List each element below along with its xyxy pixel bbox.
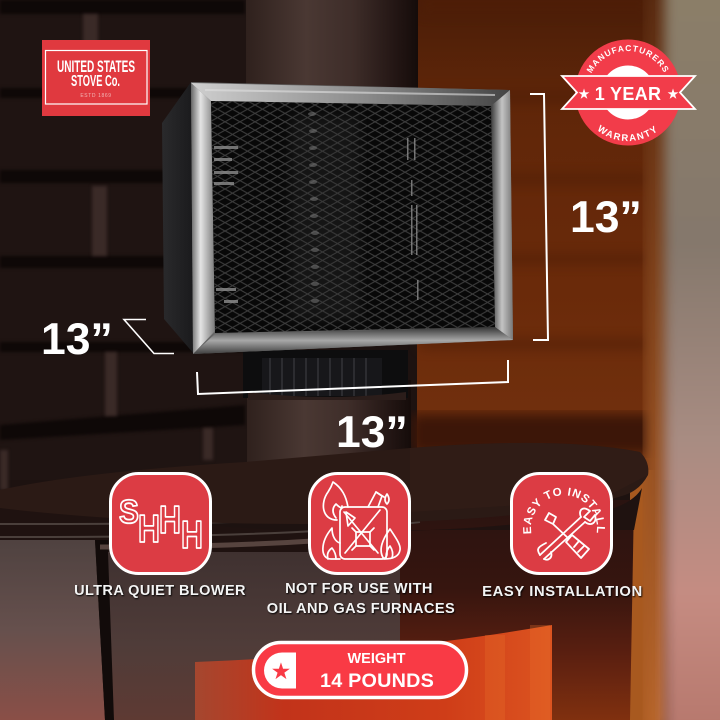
feature: easy installation: EASY INSTALLATION: [482, 584, 643, 600]
weight pill: WEIGHT: [348, 651, 406, 667]
wood wall: [411, 0, 677, 720]
icon: star tag: ★: [272, 661, 290, 683]
feature: not for oil and gas furnaces: OIL AND GAS FURNACES: [267, 601, 455, 617]
warranty badge: [560, 40, 697, 146]
feature: ultra quiet blower: ULTRA QUIET BLOWER: [74, 583, 246, 599]
feature: easy installation: [482, 472, 644, 600]
warranty badge: 1 YEAR: [595, 84, 661, 104]
brick wall: [0, 0, 260, 490]
ribbon: [562, 76, 695, 109]
feature: not for oil and gas furnaces: NOT FOR USE WITH: [285, 581, 433, 597]
blurred foreground right: [664, 0, 720, 720]
dimension: depth: [41, 315, 174, 364]
badge arc text: MANUFACTURERS: [586, 45, 668, 73]
mesh grille: [211, 101, 495, 333]
dimension: width: [197, 360, 508, 457]
feature: not for oil and gas furnaces: [267, 474, 455, 617]
product: blower unit: [162, 82, 513, 400]
icon: shhh: H: [159, 498, 181, 542]
warranty badge: ★: [579, 87, 590, 101]
weight pill: 14 POUNDS: [320, 670, 434, 692]
stove body: [0, 443, 648, 720]
side panel: [162, 82, 194, 354]
warranty badge: ★: [668, 87, 679, 101]
icon: shhh: [110, 474, 210, 574]
icon: shhh: H: [138, 507, 160, 551]
dimension: width: 13”: [336, 408, 408, 457]
icon: shhh: H: [181, 513, 203, 557]
stove top: [0, 443, 648, 524]
logo: United States Stove Co: ESTD 1869: [80, 93, 112, 99]
logo: United States Stove Co: STOVE Co.: [71, 73, 120, 90]
icon: shhh: S: [119, 494, 139, 530]
weight pill: [254, 642, 466, 698]
logo: United States Stove Co: UNITED STATES: [57, 58, 135, 76]
stove pipe: [246, 0, 418, 100]
icon: fuel can with flames: [310, 474, 410, 574]
dimension: depth: 13”: [41, 315, 113, 364]
feature: ultra quiet blower: [74, 474, 246, 599]
icon: star tag: [264, 652, 296, 688]
icon: tools: [510, 472, 613, 575]
dimension: height: 13”: [570, 193, 642, 242]
logo: United States Stove Co: [42, 40, 150, 116]
dimension: height: [530, 94, 642, 340]
frame: [191, 82, 513, 354]
icon: tools: EASY TO INSTALL: [523, 488, 605, 534]
warranty badge: WARRANTY: [598, 124, 656, 142]
collar: [243, 350, 408, 400]
